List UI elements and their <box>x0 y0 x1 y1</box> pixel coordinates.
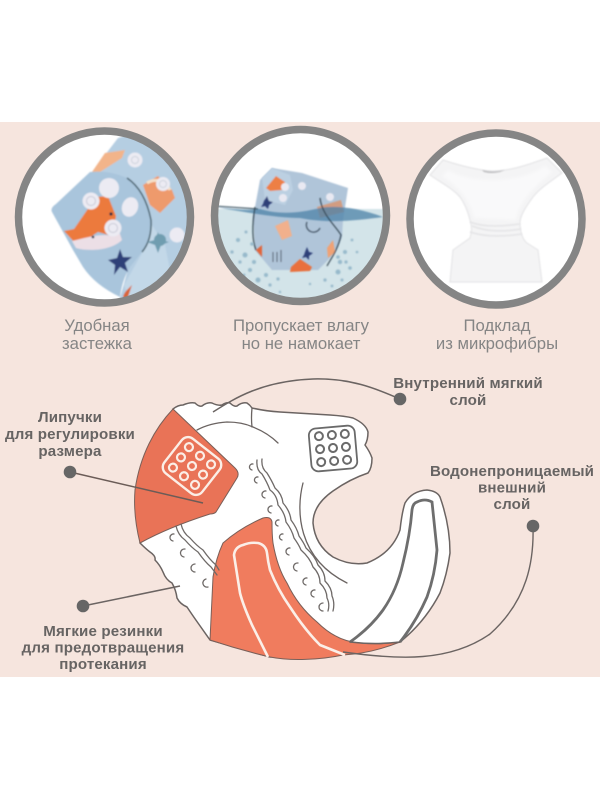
red lower panel <box>210 518 400 659</box>
callout: inner layer: Внутренний мягкий <box>393 375 543 392</box>
grey absorbent pad line <box>350 500 437 642</box>
hook tape grid, red tab <box>160 434 224 498</box>
elastic wavy lines <box>176 459 334 611</box>
callout: waterproof outer layer: Водонепроницаемый <box>430 463 594 480</box>
caption: lining: из микрофибры <box>436 334 558 353</box>
callout: hook tapes: для регулировки <box>5 426 135 443</box>
photo circle: fastener <box>18 128 200 305</box>
callout: inner layer: слой <box>450 392 486 409</box>
caption: fastener: застежка <box>62 334 133 353</box>
caption: lining: Подклад <box>464 316 530 335</box>
callout: soft elastics: протекания <box>59 656 147 673</box>
callout: hook tapes <box>5 409 203 503</box>
caption: moisture: но не намокает <box>242 334 361 353</box>
diaper diagram <box>135 403 450 659</box>
elastic stitch marks <box>170 464 323 611</box>
caption: moisture: Пропускает влагу <box>233 316 369 335</box>
background panel <box>0 122 600 677</box>
inner fold lines <box>197 408 347 583</box>
callout: hook tapes: размера <box>38 443 102 460</box>
red side tab <box>135 409 238 543</box>
white stitch on red panel <box>234 543 345 657</box>
callout: soft elastics: Мягкие резинки <box>43 623 163 640</box>
diaper body outline <box>140 403 450 657</box>
caption: fastener: Удобная <box>64 316 130 335</box>
callout: soft elastics: для предотвращения <box>22 640 184 656</box>
hook tape grid, grey <box>308 425 358 472</box>
callout: waterproof outer layer <box>343 463 594 657</box>
photo circle: microfiber lining <box>410 133 582 305</box>
photo circle: water <box>210 130 392 309</box>
callout: inner layer <box>213 375 543 412</box>
callout: waterproof outer layer: внешний <box>478 480 546 496</box>
callout: soft elastics <box>22 586 184 673</box>
callout: hook tapes: Липучки <box>38 409 102 426</box>
outline over pad and panel <box>350 642 400 644</box>
callout: waterproof outer layer: слой <box>494 496 530 513</box>
